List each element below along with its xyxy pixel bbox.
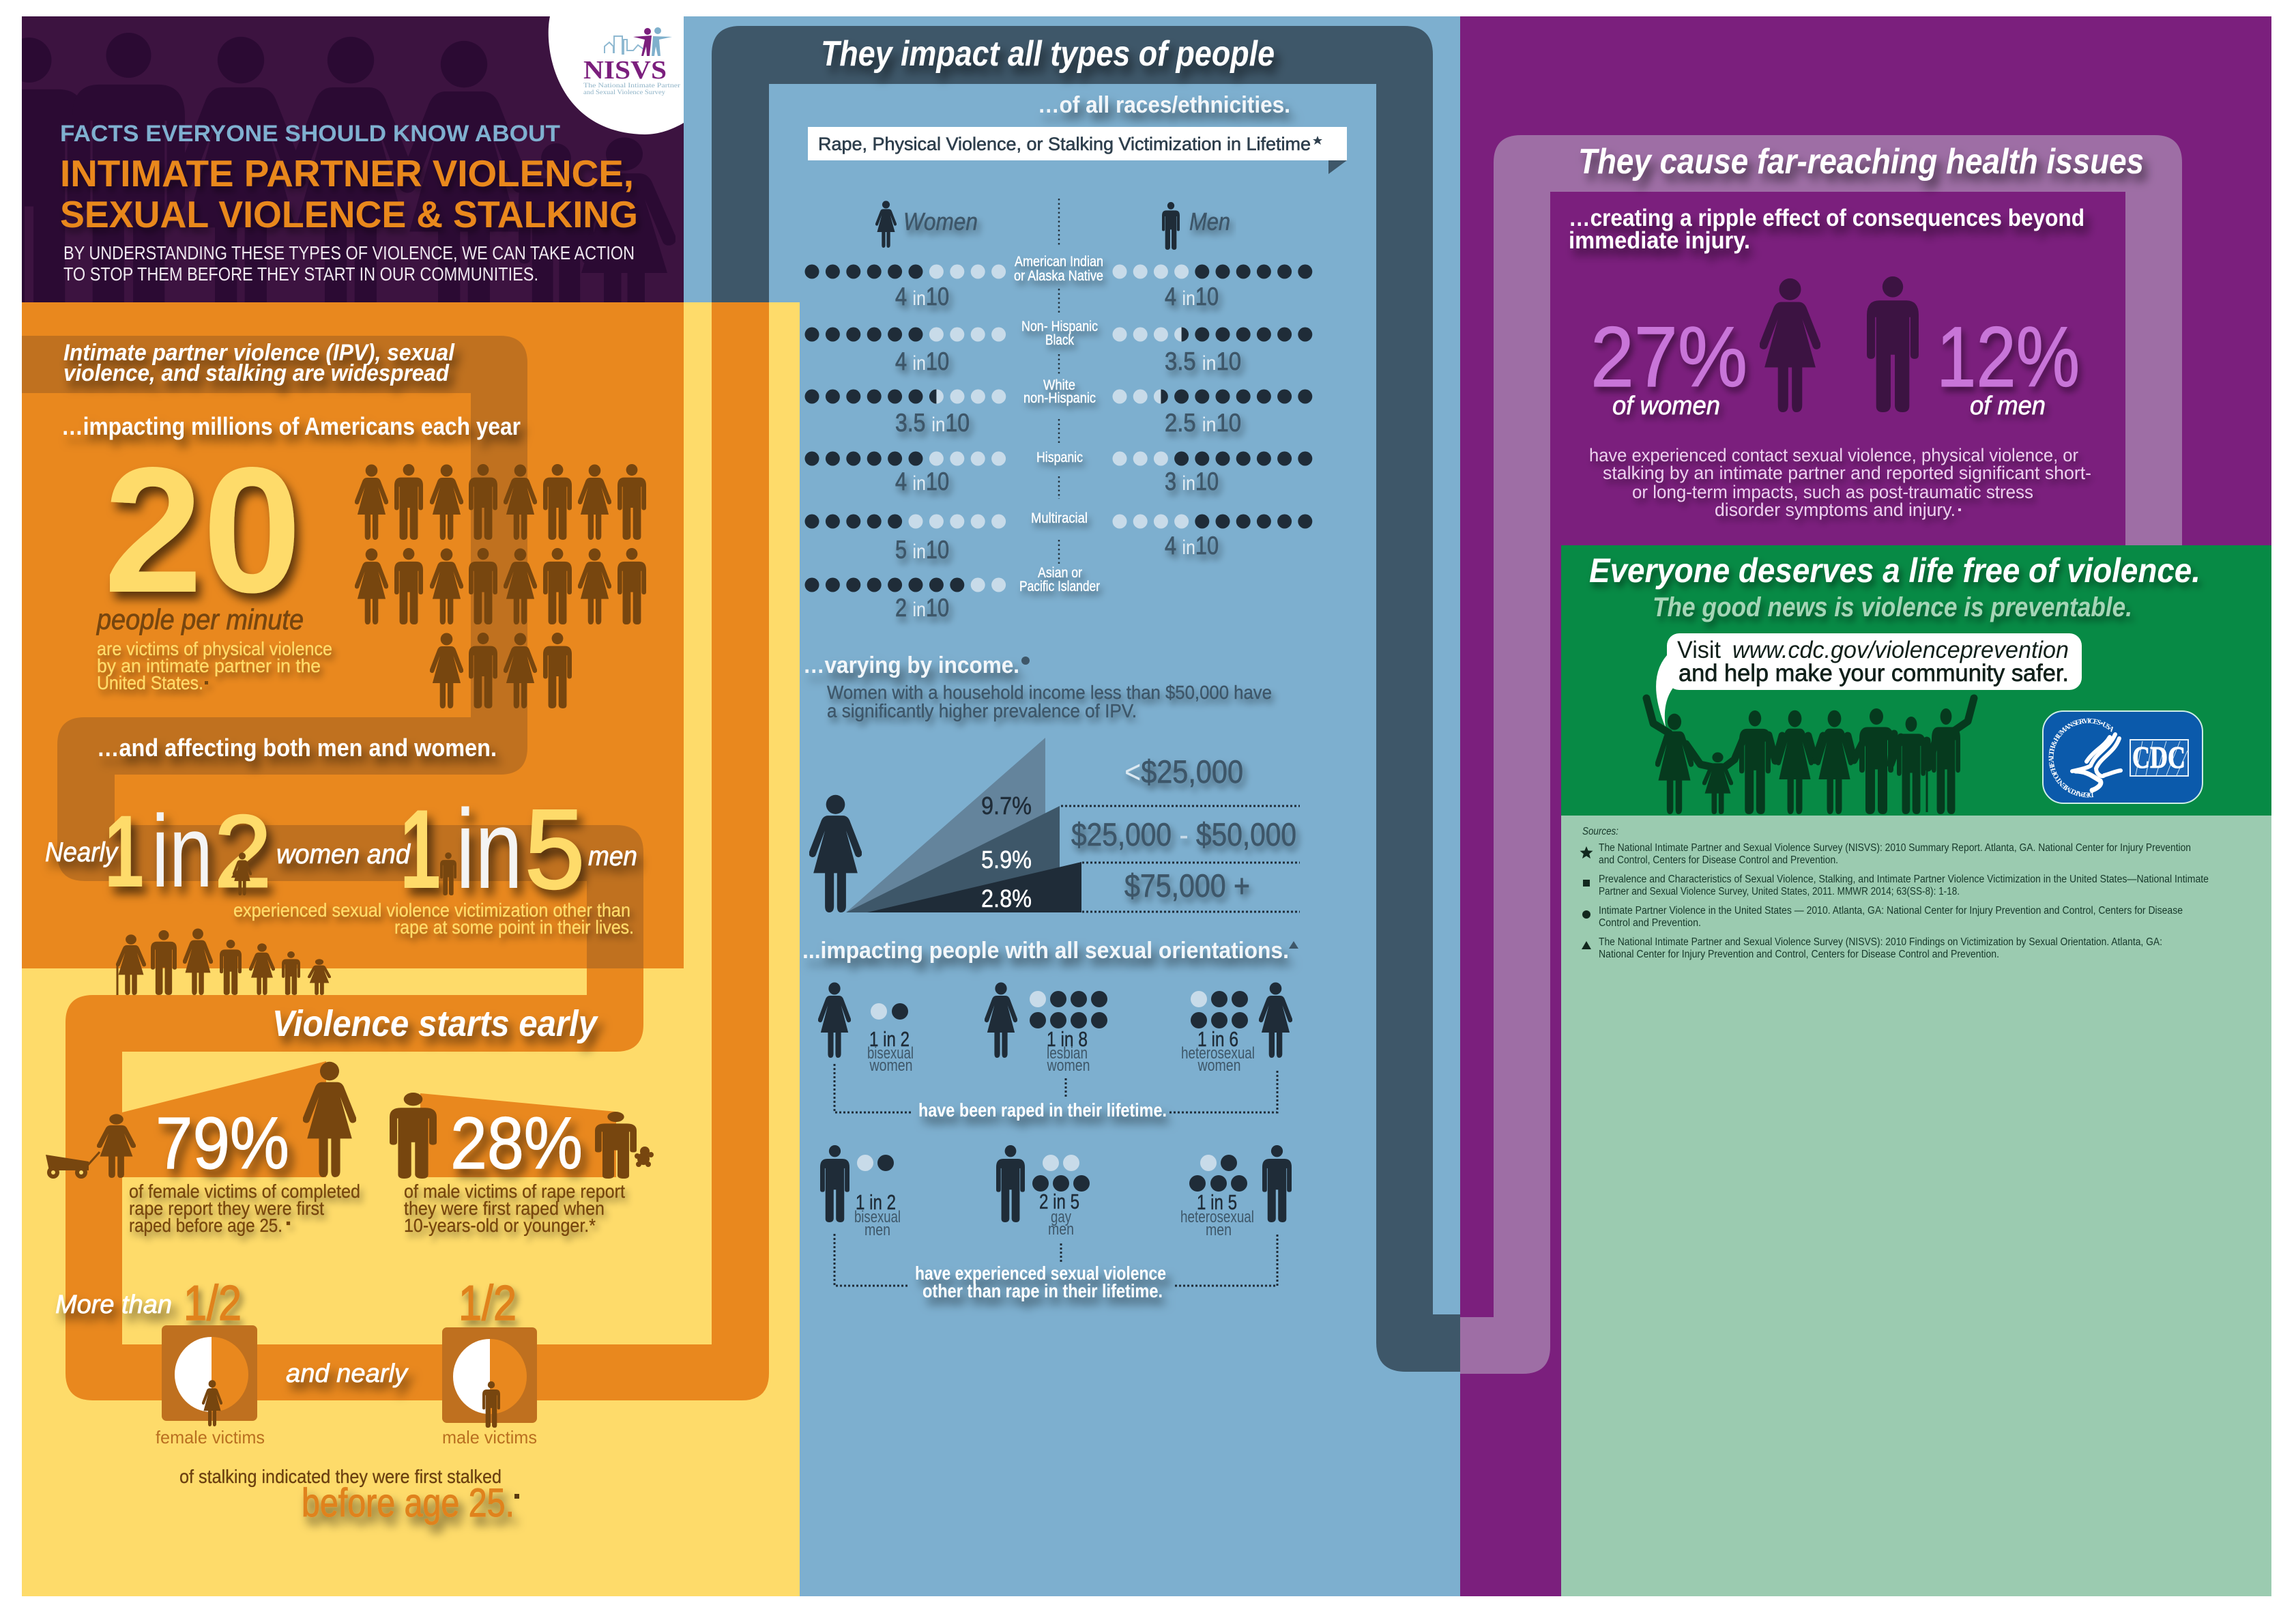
logo: HHS and CDC: CDC (2132, 740, 2185, 775)
age wedge: female (122, 1061, 326, 1177)
race labels: White (1043, 377, 1075, 393)
panel background: green block (1561, 545, 2271, 816)
group: women orientations: 1 in 2 (869, 1027, 910, 1051)
logo: NISVS: NISVS (583, 56, 667, 85)
race labels: Non- Hispanic (1021, 319, 1098, 334)
panel: health issues (1569, 142, 2144, 520)
note: stalking: of stalking indicated they were first stalked (179, 1466, 502, 1487)
source 2: Partner and Sexual Violence Survey, United States, 2011. MMWR 2014; 63(SS-8): 1-18. (1599, 886, 1960, 897)
note: impacts (1589, 445, 2091, 520)
icon: teddy bear (635, 1147, 654, 1167)
heading: health issues: They cause far-reaching health issues (1578, 142, 2144, 182)
note: male victims: 10-years-old or younger.* (404, 1215, 596, 1236)
logo: HHS and CDC (2042, 710, 2203, 804)
ratios: women: 4 in10 (895, 347, 949, 375)
heading: widespread: Intimate partner violence (IPV), sexual (63, 340, 455, 366)
source 3 (1599, 905, 2183, 929)
victims note: by an intimate partner in the (97, 655, 321, 676)
half pie: male (442, 1327, 537, 1423)
heading: impact all types: They impact all types of people (821, 34, 1275, 74)
chart: income wedges: 9.7% (981, 792, 1032, 820)
dot chart: men by race (1120, 272, 1306, 521)
race labels (1014, 254, 1103, 594)
group: men orientations: gay (1051, 1208, 1071, 1226)
caption: raped in lifetime: have been raped in their lifetime. (918, 1099, 1167, 1121)
group: men orientations: 1 in 5 (1197, 1190, 1237, 1214)
marker: star (1580, 846, 1593, 859)
heading: life free of violence: Everyone deserves a life free of violence. (1589, 551, 2200, 590)
race labels: Hispanic (1036, 450, 1083, 465)
source 4: The National Intimate Partner and Sexual Violence Survey (NISVS): 2010 Findings on Victimization by Sexual Orientation. Atlanta, GA: (1599, 936, 2162, 948)
group: women orientations: women (1197, 1056, 1240, 1075)
logo: HHS and CDC: DEPARTMENT OF HEALTH & HUMAN SERVICES • USA (2048, 718, 2113, 797)
ratios: men (1165, 283, 1241, 560)
statistic: 27%: 27% (1590, 310, 1747, 405)
race labels: Multiracial (1031, 510, 1088, 526)
group: men orientations: 2 in 5 (1039, 1190, 1079, 1213)
ratios: men: 4 in10 (1165, 283, 1219, 311)
panel background: yellow column (22, 302, 800, 1596)
statistic: 1 in 2 women and 1 in 5 men: Nearly (45, 837, 119, 867)
statistic: 1 in 2 women and 1 in 5 men (45, 786, 637, 912)
icon: boy (595, 1112, 637, 1179)
chart: income wedges: 2.8% (981, 884, 1032, 912)
big number 20: 20 (104, 430, 302, 630)
note: female victims: rape report they were first (129, 1198, 324, 1219)
marker: square (1583, 880, 1590, 887)
panel background: orange block (22, 302, 684, 968)
subheading: races: …of all races/ethnicities. (1038, 92, 1290, 118)
group: women orientations: bisexual (867, 1044, 914, 1063)
source 4 (1599, 936, 2162, 960)
callout: before age 25: before age 25. (302, 1481, 514, 1525)
fraction: male: 1/2 (459, 1276, 517, 1331)
source 2 (1599, 874, 2209, 897)
note: female victims: raped before age 25. (129, 1215, 282, 1236)
statistic: 1 in 2 women and 1 in 5 men: 2 (214, 794, 272, 908)
note: impacts: disorder symptoms and injury. (1715, 500, 1956, 520)
source 1 (1599, 842, 2191, 866)
race labels: Black (1045, 332, 1074, 348)
banner: lifetime victimization (808, 127, 1347, 174)
statistic: 79%: 79% (156, 1101, 289, 1184)
icon: woman income (809, 795, 862, 912)
header title: SEXUAL VIOLENCE & STALKING (60, 193, 638, 235)
panel background: brown ribbon (22, 336, 643, 968)
ratios: women (895, 283, 970, 622)
statistic: 1 in 2 women and 1 in 5 men: in (151, 794, 213, 908)
heading: widespread: violence, and stalking are widespread (63, 360, 450, 386)
subheading: ripple effect (1569, 205, 2084, 254)
income note: a significantly higher prevalence of IPV. (827, 700, 1137, 721)
icon: family of seven generations (116, 928, 331, 995)
subheading: men and women: …and affecting both men and women. (97, 734, 497, 762)
statistic: 1 in 2 women and 1 in 5 men: women and (276, 839, 411, 869)
panel background: light purple ribbon (1460, 135, 2182, 1374)
label: of women: of women (1612, 392, 1720, 420)
dot chart: women by race (812, 272, 1000, 585)
statistic: 1 in 2 women and 1 in 5 men: 5 (525, 786, 585, 912)
income bands: $75,000 + (1124, 867, 1250, 904)
group: men orientations: men (1206, 1221, 1232, 1239)
group: men orientations: men (1048, 1220, 1074, 1239)
source 3: Control and Prevention. (1599, 917, 1701, 929)
text: more than: More than (55, 1291, 172, 1319)
people per minute: people per minute (96, 603, 304, 635)
group: women orientations: lesbian (1047, 1044, 1088, 1063)
victims note (97, 638, 332, 693)
heading: violence starts early: Violence starts early (272, 1003, 599, 1044)
statistic: 12%: 12% (1936, 310, 2080, 405)
group: women orientations: women (869, 1056, 913, 1075)
panel: widespread (45, 340, 646, 995)
income bands: $25,000 - $50,000 (1071, 816, 1296, 852)
subheading: orientations: ...impacting people with all sexual orientations. (802, 938, 1289, 964)
logo: NISVS: The National Intimate Partner (583, 83, 681, 89)
icon: men header (1162, 202, 1180, 250)
note: impacts: have experienced contact sexual violence, physical violence, or (1589, 445, 2078, 465)
header subtitle: BY UNDERSTANDING THESE TYPES OF VIOLENCE, WE CAN TAKE ACTION (63, 242, 635, 263)
income note: Women with a household income less than $50,000 have (827, 682, 1272, 703)
source 2: Prevalence and Characteristics of Sexual Violence, Stalking, and Intimate Partner Violence Victimization in the United States—National Intimate (1599, 874, 2209, 885)
race labels: Asian or (1038, 565, 1082, 581)
label: male victims: male victims (442, 1427, 537, 1447)
group: men orientations (820, 1145, 1292, 1286)
group: women orientations: women (1047, 1056, 1090, 1075)
label: of men: of men (1970, 392, 2046, 420)
logo: NISVS: and Sexual Violence Survey (583, 89, 665, 96)
group: women orientations (818, 983, 1292, 1112)
icon: family holding hands (1646, 698, 1974, 814)
race labels: non-Hispanic (1023, 390, 1096, 406)
panel background: orange ribbon (66, 302, 769, 1400)
marker: circle (1582, 910, 1590, 919)
panel: prevention (1589, 551, 2203, 814)
icon: small man (440, 852, 456, 895)
statistic: 1 in 2 women and 1 in 5 men: men (588, 841, 637, 871)
half pie: female (162, 1325, 257, 1421)
note: impacts: or long-term impacts, such as post-traumatic stress (1632, 482, 2033, 502)
source 4: National Center for Injury Prevention and Control, Centers for Disease Control and Prevention. (1599, 949, 1999, 960)
panel: sources (1580, 826, 2209, 960)
sexual violence note (233, 899, 634, 938)
icon: woman (303, 1062, 356, 1177)
logo: NISVS (549, 16, 684, 134)
statistic: 1 in 2 women and 1 in 5 men: 1 (104, 794, 144, 908)
sexual violence note: experienced sexual violence victimization other than (233, 899, 630, 921)
speech bubble: www.cdc.gov/violenceprevention (1732, 637, 2069, 663)
heading: widespread (63, 340, 455, 386)
panel: header (22, 16, 684, 302)
marker: source square (514, 1494, 519, 1499)
ratios: women: 3.5 in10 (895, 409, 970, 437)
header title: INTIMATE PARTNER VIOLENCE, (60, 152, 634, 194)
race labels: Pacific Islander (1019, 579, 1100, 594)
panel: all types of people (802, 34, 1347, 1301)
group: men orientations: men (864, 1221, 890, 1239)
statistic: 1 in 2 women and 1 in 5 men: in (456, 786, 523, 912)
group: women orientations: heterosexual (1181, 1044, 1255, 1063)
icon: woman small (202, 1380, 222, 1426)
subheading: ripple effect: …creating a ripple effect of consequences beyond (1569, 205, 2084, 231)
group: women orientations: 1 in 8 (1047, 1027, 1088, 1051)
header background (22, 16, 684, 302)
group: women orientations: 1 in 6 (1197, 1027, 1238, 1051)
ratios: men: 3.5 in10 (1165, 347, 1241, 375)
marker: triangle (1582, 941, 1591, 949)
speech bubble: Visit (1677, 637, 1721, 663)
header silhouettes (22, 33, 675, 302)
income note (827, 682, 1272, 721)
label: women: Women (903, 207, 978, 235)
label: men: Men (1189, 207, 1230, 235)
panel background: blue column (684, 16, 1460, 1596)
speech bubble: and help make your community safer. (1679, 660, 2069, 687)
fraction: female: 1/2 (184, 1276, 242, 1331)
header title (60, 152, 638, 235)
source 1: The National Intimate Partner and Sexual Violence Survey (NISVS): 2010 Summary Report. Atlanta, GA. National Center for Injury Prevention (1599, 842, 2191, 854)
marker: source circle (1021, 657, 1030, 665)
icon: small woman (233, 852, 252, 895)
icon: man (390, 1093, 437, 1179)
note: male victims: they were first raped when (404, 1198, 605, 1219)
source 3: Intimate Partner Violence in the United States — 2010. Atlanta, GA: National Center for Injury Prevention and Control, Centers for Disease (1599, 905, 2183, 917)
note: female victims: of female victims of completed (129, 1181, 360, 1202)
statistic: 1 in 2 women and 1 in 5 men: 1 (400, 786, 441, 912)
caption: sexual violence in lifetime: other than rape in their lifetime. (922, 1280, 1163, 1301)
icon: wagon (46, 1152, 100, 1179)
header kicker: FACTS EVERYONE SHOULD KNOW ABOUT (60, 121, 560, 147)
chart: income wedges: 5.9% (981, 846, 1032, 874)
note: impacts: stalking by an intimate partner and reported significant short- (1603, 463, 2091, 483)
subheading: income: …varying by income. (803, 652, 1019, 678)
header subtitle: TO STOP THEM BEFORE THEY START IN OUR COMMUNITIES. (63, 263, 538, 285)
subheading: preventable: The good news is violence is preventable. (1653, 592, 2132, 622)
ratios: women: 2 in10 (895, 594, 949, 622)
group: men orientations: bisexual (854, 1208, 901, 1226)
banner: lifetime victimization: Rape, Physical Violence, or Stalking Victimization in Lifetime (818, 134, 1311, 154)
label: female victims: female victims (156, 1427, 265, 1447)
header subtitle (63, 242, 635, 285)
icon: girl (97, 1114, 136, 1178)
note: male victims (404, 1181, 625, 1236)
icon: woman purple (1760, 278, 1820, 412)
sexual violence note: rape at some point in their lives. (394, 917, 634, 938)
ratios: men: 4 in10 (1165, 532, 1219, 560)
group: men orientations: heterosexual (1180, 1208, 1254, 1226)
sources heading: Sources: (1582, 826, 1618, 837)
people grid: 20 figures (355, 464, 646, 708)
race labels: or Alaska Native (1014, 268, 1103, 284)
icon: man small (482, 1381, 500, 1428)
subheading: millions: …impacting millions of Americans each year (61, 412, 521, 440)
victims note: United States. (97, 672, 203, 693)
note: male victims: of male victims of rape report (404, 1181, 625, 1202)
race labels: American Indian (1015, 254, 1103, 270)
victims note: are victims of physical violence (97, 638, 332, 659)
ratios: women: 5 in10 (895, 536, 949, 564)
caption: sexual violence in lifetime (915, 1263, 1166, 1301)
panel background: mint sources block (1561, 816, 2271, 1596)
caption: sexual violence in lifetime: have experienced sexual violence (915, 1263, 1166, 1284)
income bands (1071, 753, 1296, 904)
statistic: 28%: 28% (450, 1101, 583, 1184)
age wedge: male (420, 1093, 616, 1177)
speech bubble (1656, 633, 2082, 727)
icon: women header (875, 201, 897, 248)
marker: source triangle (1289, 941, 1298, 949)
panel: violence starts early (46, 1003, 654, 1525)
income bands: <$25,000 (1124, 753, 1243, 790)
source 1: and Control, Centers for Disease Control and Prevention. (1599, 854, 1838, 866)
ratios: women: 4 in10 (895, 467, 949, 495)
chart: income wedges (846, 738, 1300, 912)
ratios: men: 2.5 in10 (1165, 409, 1241, 437)
group: men orientations: 1 in 2 (856, 1190, 896, 1214)
note: female victims (129, 1181, 360, 1236)
panel background: dark blue ribbon (712, 26, 1460, 1372)
panel background: purple column (1460, 16, 2271, 1596)
ratios: women: 4 in10 (895, 283, 949, 311)
icon: man purple (1867, 276, 1919, 412)
subheading: ripple effect: immediate injury. (1569, 227, 1750, 254)
ratios: men: 3 in10 (1165, 467, 1219, 495)
text: and nearly: and nearly (286, 1359, 409, 1388)
